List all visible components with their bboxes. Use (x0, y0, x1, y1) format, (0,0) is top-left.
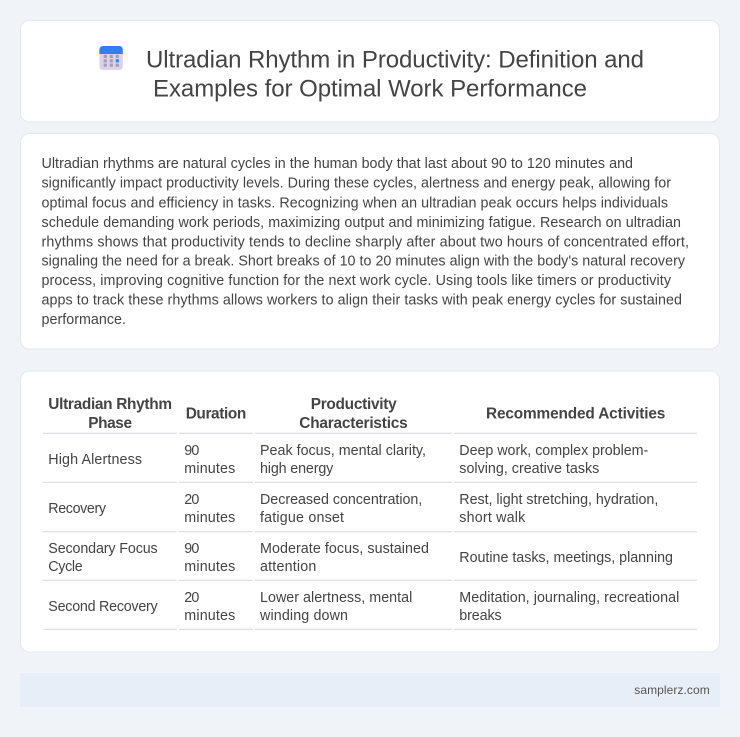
panel: phases table (20, 371, 720, 652)
table header row: Characteristics (299, 415, 408, 432)
table row: Secondary Focus Cycle: Routine tasks, meetings, planning (459, 550, 673, 566)
table row: Recovery: minutes (184, 510, 235, 526)
text block: ultradian rhythm paragraph: schedule demanding work periods, maximizing output and minimizing fatigue. Research on ultradian (42, 215, 681, 231)
title: Ultradian Rhythm in Productivity: Definition and (146, 46, 644, 74)
text block: ultradian rhythm paragraph: process, improving cognitive function for the next work cycle. Using tools like timers or productivity (42, 273, 672, 289)
table row: High Alertness: high energy (260, 461, 334, 477)
table header row: Productivity (311, 396, 397, 413)
table row: High Alertness: 90 (184, 443, 199, 459)
table row: Recovery: 20 (184, 492, 199, 508)
table row: Second Recovery: Lower alertness, mental (260, 590, 412, 606)
table row: Recovery: short walk (459, 510, 526, 526)
icon: calendar (99, 46, 123, 70)
table header row: Duration (186, 405, 246, 422)
text block: ultradian rhythm paragraph: optimal focus and efficiency in tasks. Recognizing when an ultradian peak occurs helps individuals (42, 195, 668, 211)
table header row: Recommended Activities (486, 405, 665, 422)
table header row: Phase (88, 415, 132, 432)
table row: Second Recovery: breaks (459, 608, 502, 624)
table row: Secondary Focus Cycle: attention (260, 559, 316, 575)
text block: ultradian rhythm paragraph: signaling the need for a break. Short breaks of 10 to 20 minutes align with the body's natural recovery (42, 254, 686, 270)
table row: Second Recovery: minutes (184, 608, 235, 624)
text block: ultradian rhythm paragraph: performance. (42, 312, 126, 328)
table row: Recovery: Recovery (48, 501, 107, 517)
panel: header card (20, 20, 720, 122)
table row: Recovery: fatigue onset (260, 510, 344, 526)
text block: ultradian rhythm paragraph: apps to track these rhythms allows workers to align their tasks with peak energy cycles for sustained (42, 292, 682, 308)
table row: High Alertness: High Alertness (48, 452, 142, 468)
table row: Second Recovery (43, 590, 697, 629)
table row: Second Recovery: 20 (184, 590, 199, 606)
table header row (43, 396, 697, 433)
text block: ultradian rhythm paragraph: significantly impact productivity levels. During these cycles, alertness and energy peak, allowing for (42, 176, 671, 192)
footer bar: samplerz.com (634, 683, 710, 697)
title (146, 46, 644, 102)
text block: ultradian rhythm paragraph: rhythms shows that productivity tends to decline sharply after about two hours of concentrated effort, (42, 234, 689, 250)
table row: High Alertness: Deep work, complex problem- (459, 443, 649, 459)
table row: Secondary Focus Cycle: Secondary Focus (48, 541, 158, 557)
title: Examples for Optimal Work Performance (153, 76, 587, 102)
footer bar (20, 673, 720, 707)
table row: Secondary Focus Cycle: Moderate focus, sustained (260, 541, 429, 557)
table row: Recovery (43, 492, 697, 532)
table row: Second Recovery: Second Recovery (48, 599, 159, 615)
table header row: Ultradian Rhythm (48, 396, 172, 413)
table row: Secondary Focus Cycle (43, 541, 697, 580)
text block: ultradian rhythm paragraph: Ultradian rhythms are natural cycles in the human body that last about 90 to 120 minutes and (42, 156, 633, 172)
table row: Secondary Focus Cycle: Cycle (48, 559, 83, 575)
table row: Second Recovery: winding down (259, 608, 348, 624)
table row: Recovery: Rest, light stretching, hydration, (459, 492, 658, 508)
table row: Secondary Focus Cycle: minutes (184, 559, 235, 575)
panel: description (20, 134, 720, 349)
table row: High Alertness: minutes (184, 461, 235, 477)
table row: Secondary Focus Cycle: 90 (184, 541, 199, 557)
table row: High Alertness: Peak focus, mental clarity, (260, 443, 426, 459)
table row: High Alertness: solving, creative tasks (459, 461, 599, 477)
table row: Recovery: Decreased concentration, (260, 492, 422, 508)
table row: High Alertness (43, 443, 697, 482)
text block: ultradian rhythm paragraph (42, 156, 689, 328)
table row: Second Recovery: Meditation, journaling, recreational (459, 590, 679, 606)
